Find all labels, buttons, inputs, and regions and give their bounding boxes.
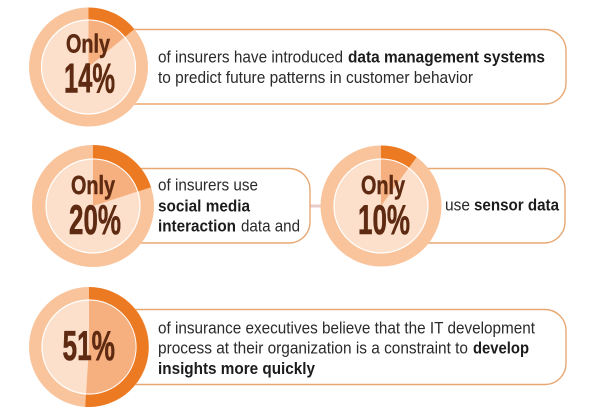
donut: 14 percent: 14% bbox=[64, 54, 115, 102]
panel: social media interaction callout bbox=[32, 145, 310, 267]
donut: 14 percent: Only bbox=[66, 28, 110, 58]
callout text bbox=[158, 48, 545, 87]
donut: 51 percent bbox=[29, 287, 149, 407]
donut: 10 percent bbox=[320, 146, 442, 266]
callout text: of insurers use bbox=[158, 176, 258, 194]
donut: 20 percent: 20% bbox=[69, 196, 121, 243]
callout text: to predict future patterns in customer behavior bbox=[158, 69, 473, 87]
panel: data management systems callout bbox=[29, 8, 566, 126]
callout box bbox=[75, 168, 310, 243]
callout text: sensor data bbox=[474, 197, 560, 215]
panel: sensor data callout bbox=[320, 146, 565, 266]
connector between callouts bbox=[308, 204, 324, 208]
donut: 51 percent: 51% bbox=[62, 322, 115, 369]
callout text bbox=[158, 176, 300, 236]
callout box bbox=[70, 310, 566, 384]
donut: 14 percent bbox=[29, 8, 148, 126]
callout box bbox=[365, 168, 565, 243]
panel: IT development constraint callout bbox=[29, 287, 566, 407]
donut: 20 percent: Only bbox=[71, 170, 115, 200]
callout box bbox=[70, 30, 566, 104]
donut: 20 percent bbox=[32, 145, 154, 267]
donut: 10 percent: Only bbox=[361, 170, 405, 200]
callout text bbox=[158, 320, 535, 378]
donut: 10 percent: 10% bbox=[358, 196, 410, 243]
callout text: data and bbox=[241, 218, 300, 236]
callout text: process at their organization is a constraint to bbox=[158, 340, 468, 358]
callout text: insights more quickly bbox=[158, 360, 316, 378]
callout text: use bbox=[445, 197, 470, 215]
callout text: data management systems bbox=[348, 48, 545, 66]
callout text: of insurers have introduced bbox=[158, 48, 343, 66]
callout text: interaction bbox=[158, 218, 236, 236]
callout text: develop bbox=[473, 340, 529, 358]
callout text: social media bbox=[158, 198, 251, 216]
callout text: of insurance executives believe that the IT development bbox=[158, 320, 535, 338]
